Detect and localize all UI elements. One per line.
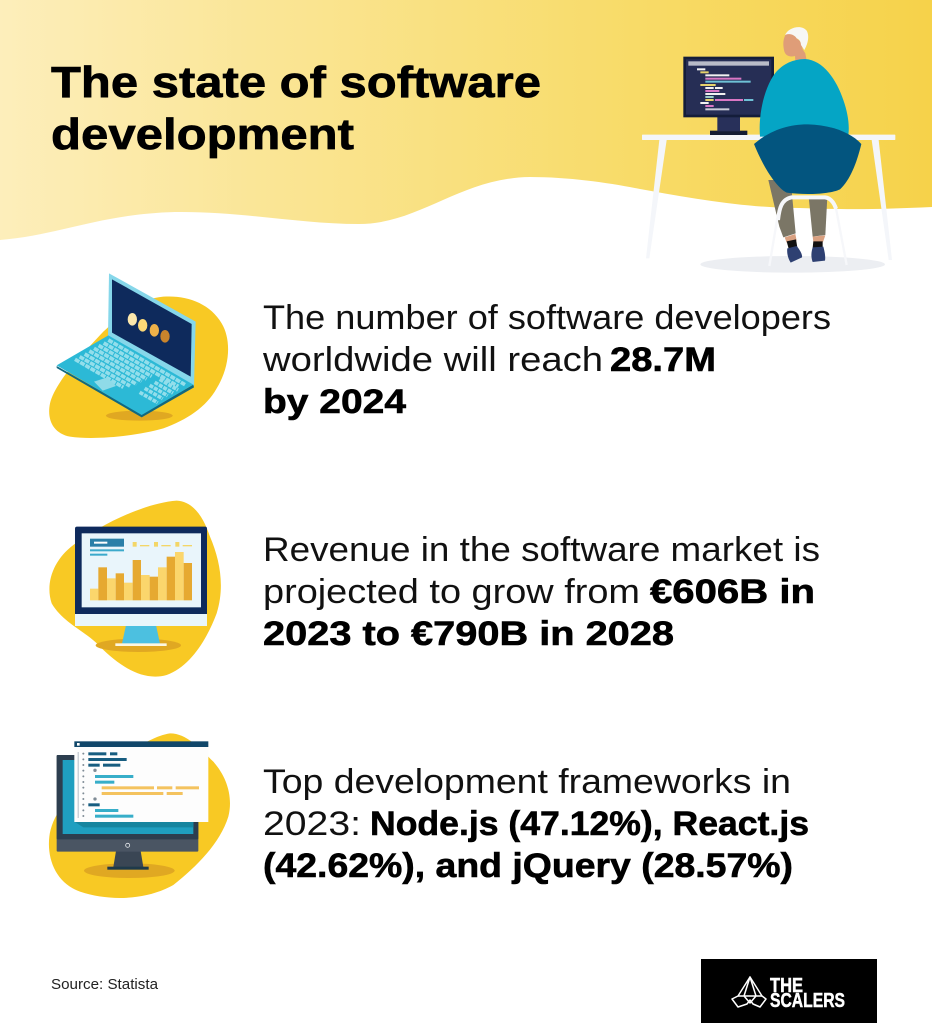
stand — [122, 625, 160, 644]
chair frame — [769, 197, 847, 266]
sweater — [760, 59, 849, 137]
row 2 text: €606B in — [650, 573, 815, 611]
shadow — [106, 411, 173, 421]
row 1: laptop icon — [49, 273, 228, 438]
desk — [642, 135, 895, 260]
row 2 text — [263, 531, 820, 653]
chart legend — [133, 542, 192, 547]
row 1 text — [262, 299, 831, 421]
icon: diamond — [732, 977, 766, 1007]
title — [51, 58, 541, 159]
title: development — [51, 110, 354, 159]
logo: The Scalers: THE — [770, 975, 803, 997]
monitor with code — [683, 57, 774, 135]
row 3: code window monitor icon — [49, 733, 230, 898]
code window — [74, 741, 208, 822]
title: The state of software — [51, 58, 541, 107]
monitor body — [75, 527, 207, 626]
illustration: developer at desk — [642, 27, 895, 273]
logo: The Scalers: SCALERS — [770, 990, 845, 1012]
blob — [49, 733, 230, 898]
row 2 text: Revenue in the software market is — [263, 531, 820, 569]
row 3 text: Node.js (47.12%), React.js — [370, 805, 809, 843]
row 3 text: 2023: — [263, 805, 361, 843]
header wave background — [0, 0, 932, 240]
row 3 text: (42.62%), and jQuery (28.57%) — [263, 847, 793, 885]
logo: The Scalers — [701, 959, 877, 1023]
blob — [49, 296, 228, 438]
row 2 text: 2023 to €790B in 2028 — [263, 615, 674, 653]
source note: Source: Statista — [51, 977, 159, 993]
socks and shoes — [785, 234, 825, 263]
row 2: dashboard monitor icon — [49, 501, 221, 677]
head and hair — [783, 27, 808, 61]
chair shell — [754, 124, 861, 194]
trousers — [768, 180, 827, 237]
chart header — [90, 539, 124, 556]
laptop lid — [108, 273, 196, 386]
floor shadow — [700, 256, 885, 273]
shadow — [96, 639, 181, 652]
monitor — [57, 755, 198, 870]
laptop base — [57, 335, 194, 417]
row 1 text: by 2024 — [263, 383, 406, 421]
row 3 text: Top development frameworks in — [263, 763, 791, 801]
row 1 text: 28.7M — [610, 341, 716, 379]
row 1 text: The number of software developers — [263, 299, 831, 337]
bar chart — [90, 552, 192, 600]
blob — [49, 501, 221, 677]
shadow — [84, 863, 175, 878]
row 1 text: worldwide will reach — [262, 341, 603, 379]
row 3 text — [263, 763, 809, 885]
row 2 text: projected to grow from — [263, 573, 640, 611]
